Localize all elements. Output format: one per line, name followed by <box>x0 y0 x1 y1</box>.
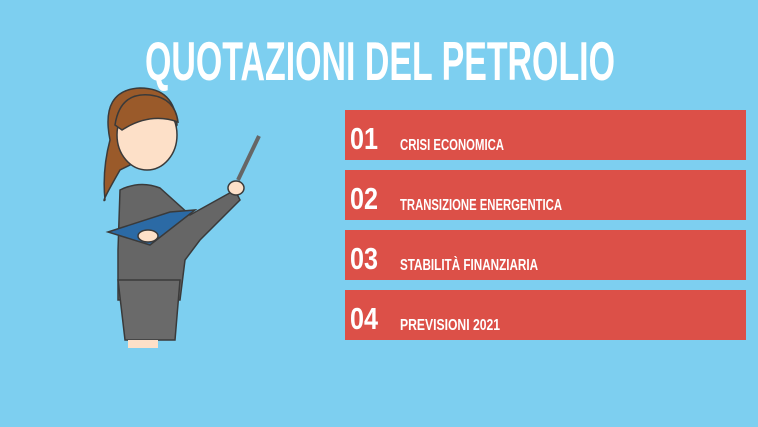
bar texts: PREVISIONI 2021 <box>400 317 500 334</box>
bars <box>345 110 746 340</box>
illustration: teacher <box>104 88 259 348</box>
bar texts: 02 <box>350 181 378 216</box>
bar texts: STABILITÀ FINANZIARIA <box>400 255 538 274</box>
bar 02 <box>345 170 746 220</box>
bar texts <box>350 121 562 336</box>
bar texts: 04 <box>350 301 379 336</box>
bar 03 <box>345 230 746 280</box>
bar texts: CRISI ECONOMICA <box>400 137 504 154</box>
bar texts: 01 <box>350 121 378 156</box>
bar texts: 03 <box>350 241 378 276</box>
bar 01 <box>345 110 746 160</box>
bar 04 <box>345 290 746 340</box>
bar texts: TRANSIZIONE ENERGENTICA <box>400 197 562 214</box>
